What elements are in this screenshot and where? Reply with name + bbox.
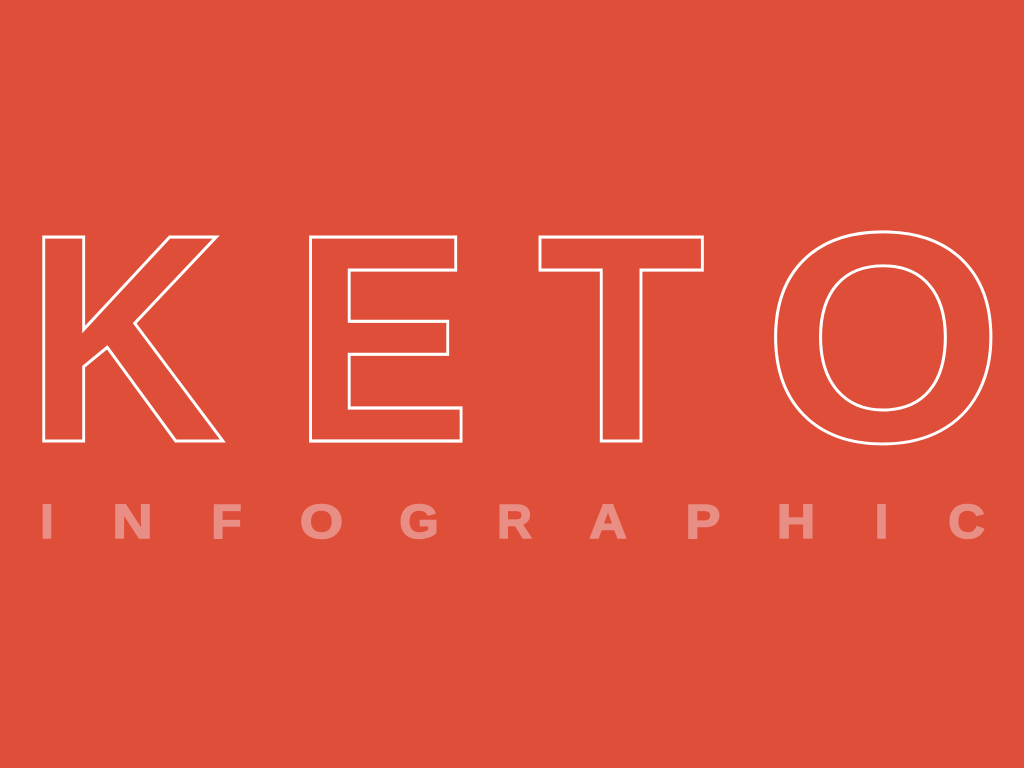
subtitle: INFOGRAPHIC spaced letters: I [875,495,888,549]
subtitle: INFOGRAPHIC spaced letters: G [399,494,439,549]
subtitle: INFOGRAPHIC spaced letters: C [948,494,985,549]
subtitle: INFOGRAPHIC spaced letters: F [211,495,242,549]
title: KETO outlined letters: T [537,173,705,504]
subtitle: INFOGRAPHIC spaced letters: P [686,494,720,549]
subtitle: INFOGRAPHIC spaced letters: R [497,495,532,549]
subtitle: INFOGRAPHIC spaced letters: A [589,494,627,549]
title: KETO outlined letters: E [293,173,472,504]
subtitle: INFOGRAPHIC spaced letters: H [777,494,815,548]
title: KETO outlined letters: O [763,170,1004,505]
subtitle: INFOGRAPHIC spaced letters [40,494,985,549]
subtitle: INFOGRAPHIC spaced letters: O [300,495,343,549]
subtitle: INFOGRAPHIC spaced letters: I [40,495,54,549]
subtitle: INFOGRAPHIC spaced letters: N [112,495,153,549]
title: KETO outlined letters [25,170,1004,505]
title: KETO outlined letters: K [25,172,225,504]
